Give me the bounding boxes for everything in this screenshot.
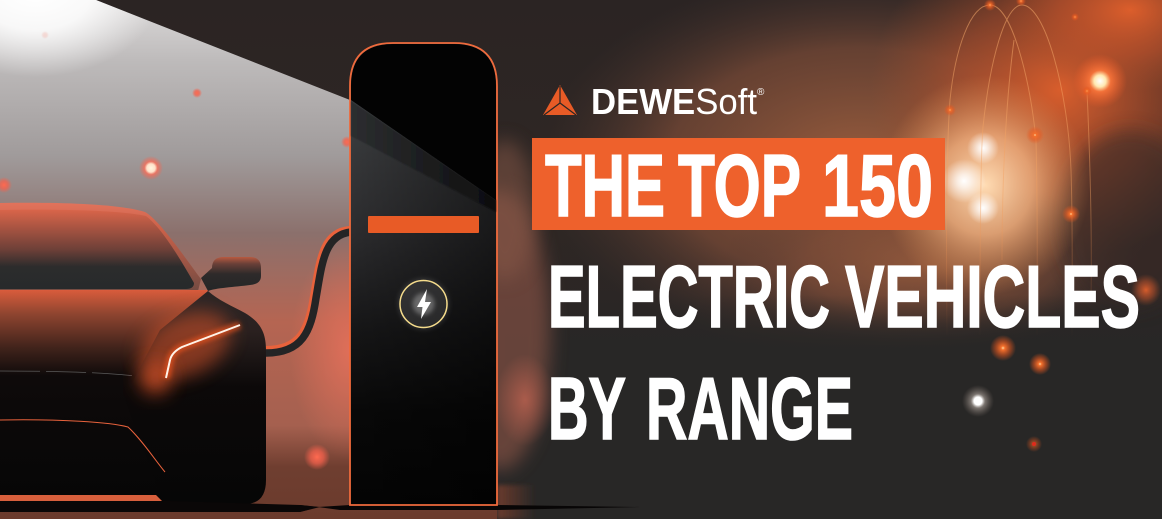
beam band over station <box>351 101 496 212</box>
light beam and garage wall <box>0 0 497 519</box>
title highlight box <box>532 138 945 230</box>
hood and body <box>0 290 208 505</box>
car <box>0 203 320 512</box>
icon: lightning bolt <box>398 278 450 330</box>
station side shading <box>351 100 496 504</box>
headlight glow <box>166 325 240 378</box>
hood line <box>0 371 135 376</box>
charging station <box>350 43 497 505</box>
floor shadow <box>0 505 640 512</box>
glow particles left <box>0 31 330 470</box>
title line 2: ELECTRIC <box>548 247 830 346</box>
title line 1: 150 <box>822 136 933 235</box>
icon: triangle mark <box>543 85 577 115</box>
wordmark: DEWESoft <box>591 81 757 122</box>
title line 3: RANGE <box>646 359 853 458</box>
windshield <box>0 210 194 289</box>
lower grille line <box>0 420 165 472</box>
registered mark: ® <box>757 87 765 98</box>
station dark top above beam <box>351 44 496 200</box>
right light arcs <box>947 5 1091 335</box>
glow particles right <box>944 0 1127 452</box>
station display slot <box>368 216 479 233</box>
title line 1: TOP <box>678 136 801 235</box>
charging cable <box>266 230 351 353</box>
title line 1: THE <box>545 136 665 235</box>
bumper stripe <box>0 495 162 501</box>
title line 3: BY <box>548 359 626 458</box>
front fender <box>125 291 266 504</box>
title line 3 <box>548 359 853 458</box>
headlight <box>166 325 240 378</box>
mirror <box>201 257 261 291</box>
title line 1 <box>545 136 933 235</box>
logo <box>543 81 765 122</box>
roof <box>0 203 201 295</box>
big cream glow <box>880 75 1090 295</box>
